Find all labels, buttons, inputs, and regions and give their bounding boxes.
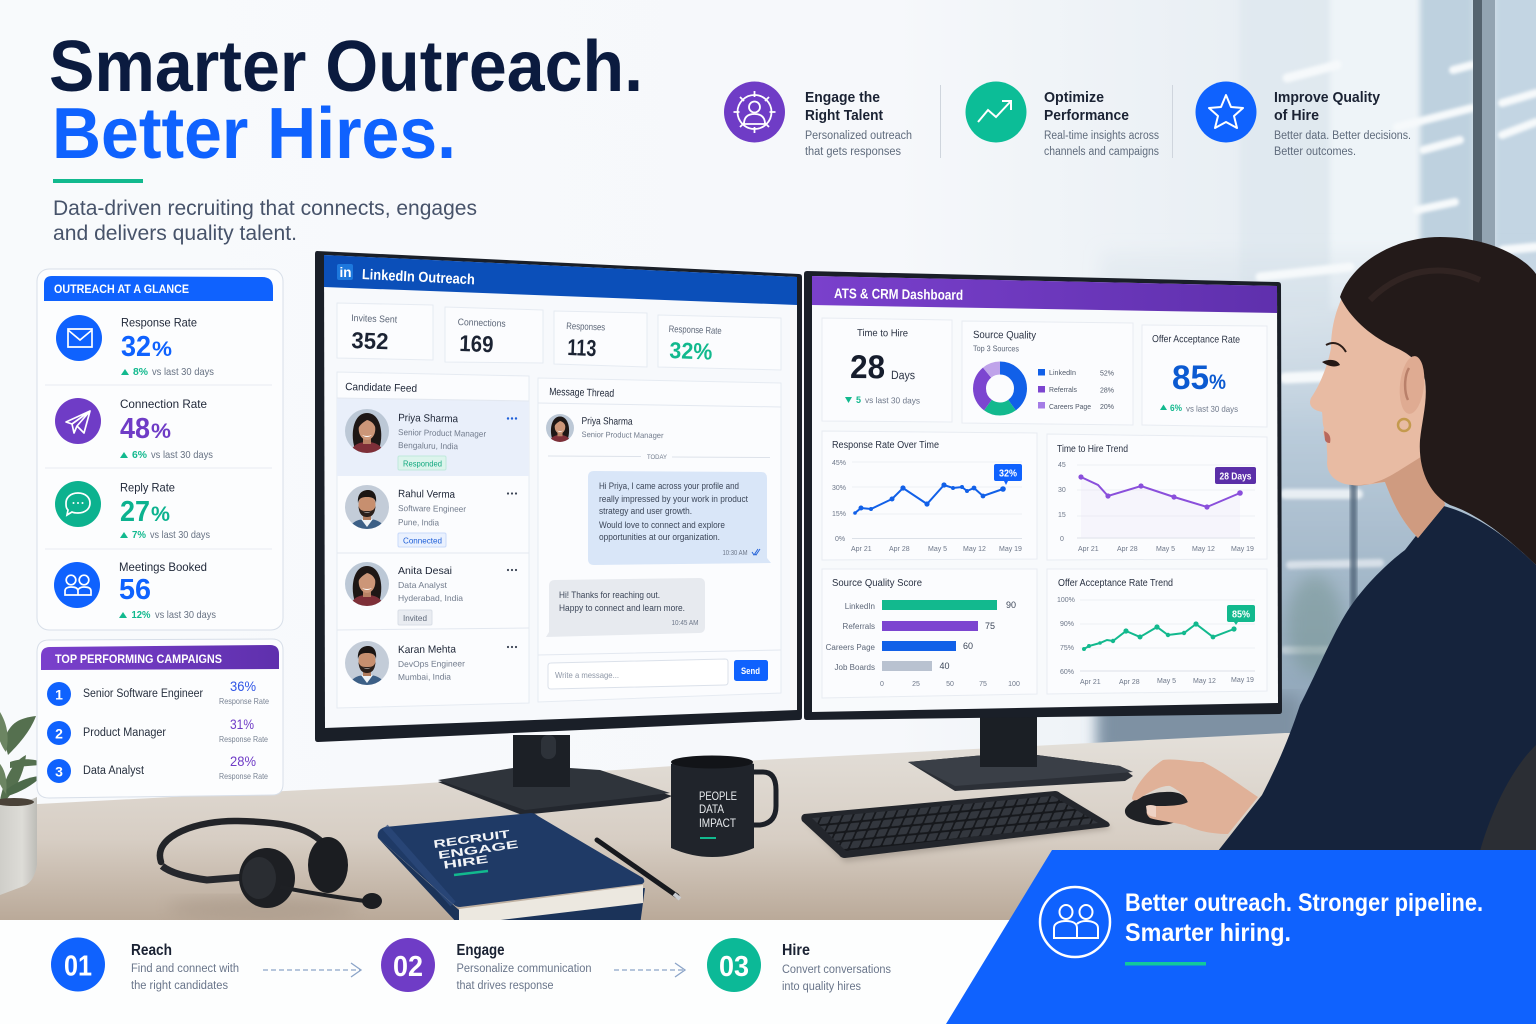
panel: candidate feed: [337, 372, 529, 708]
campaign: product manager: Product Manager: [83, 727, 166, 739]
card: source quality donut: 52%: [1100, 368, 1114, 378]
card: source quality donut: Referrals: [1049, 385, 1077, 394]
line chart: time to hire trend: [1047, 434, 1267, 560]
bar chart: source quality score: 50: [946, 681, 954, 688]
candidate: Anita Desai: [345, 562, 517, 625]
icon: people in circle: [1040, 887, 1110, 957]
metric: meetings booked: vs last 30 days: [155, 609, 216, 621]
step 02: engage: Personalize communication: [456, 963, 592, 975]
card: offer acceptance rate: [1142, 325, 1267, 427]
campaign: data analyst: 28%: [230, 754, 256, 769]
card: offer acceptance rate: vs last 30 days: [1186, 404, 1238, 414]
line chart: response rate over time: Response Rate Over Time: [832, 440, 939, 451]
notebook: recruit engage hire: HIRE: [443, 854, 489, 872]
metric: reply rate: vs last 30 days: [150, 529, 210, 541]
step 03: hire: Convert conversations: [782, 964, 891, 976]
stat card: invites sent: [337, 303, 433, 360]
step 01: reach: Find and connect with: [131, 963, 239, 975]
card: source quality donut: Source Quality: [973, 329, 1037, 342]
line chart: response rate over time: 45%: [832, 460, 846, 467]
header bar: LinkedIn Outreach: [362, 267, 475, 288]
candidate: Priya Sharma: [345, 409, 517, 470]
feature: improve quality of hire: of Hire: [1274, 107, 1319, 124]
metric: meetings booked: Meetings Booked: [119, 560, 207, 574]
candidate: Karan Mehta: Karan Mehta: [398, 643, 456, 656]
line chart: time to hire trend: Time to Hire Trend: [1057, 444, 1128, 455]
stat card: response rate: [658, 315, 781, 370]
long dark hair: [1340, 237, 1536, 565]
line chart: response rate over time: 32%: [999, 468, 1017, 480]
jacket: [1218, 505, 1536, 851]
metric: response rate: vs last 30 days: [152, 366, 214, 378]
mug: people data impact: IMPACT: [699, 816, 737, 830]
metric: reply rate: 7%: [132, 529, 147, 541]
feature: optimize performance: Optimize: [1044, 89, 1104, 106]
bar chart: source quality score: Job Boards: [835, 663, 875, 672]
line chart: response rate over time: Apr 21: [851, 546, 872, 553]
campaign: senior software engineer: [47, 679, 269, 706]
candidate: Priya Sharma: Priya Sharma: [398, 412, 458, 425]
message bubble: outgoing: really impressed by your work in product: [599, 494, 749, 504]
candidate: Karan Mehta: Mumbai, India: [398, 672, 451, 682]
hand on mouse: [1125, 759, 1258, 834]
step 03: hire: 03: [719, 951, 749, 983]
panel: message thread: Priya Sharma: [582, 416, 633, 428]
step 02: engage: Engage: [456, 942, 505, 959]
metric: reply rate: %: [151, 503, 170, 526]
line chart: offer acceptance rate trend: [1047, 569, 1267, 694]
line chart: response rate over time: [822, 431, 1037, 560]
line chart: response rate over time: Apr 28: [889, 546, 910, 553]
metric: response rate: 8%: [133, 366, 149, 378]
desk: [0, 733, 1536, 925]
bar chart: source quality score: Careers Page: [826, 643, 876, 652]
card: source quality donut: 20%: [1100, 402, 1114, 411]
message bubble: reply: 10:45 AM: [672, 620, 699, 627]
plant in pot: [0, 712, 46, 895]
line chart: offer acceptance rate trend: 60%: [1060, 669, 1074, 676]
campaign: data analyst: Data Analyst: [83, 765, 145, 777]
notebook: recruit engage hire: RECRUIT: [433, 828, 511, 851]
keyboard: [801, 791, 1112, 862]
stat card: responses: [554, 311, 647, 367]
metric: response rate: [56, 315, 214, 378]
card: offer acceptance rate: Offer Acceptance Rate: [1152, 334, 1240, 346]
feature: improve quality of hire: Improve Quality: [1274, 89, 1381, 106]
donut chart: [980, 368, 1020, 409]
message bubble: outgoing: Hi Priya, I came across your profile and: [599, 481, 739, 491]
candidate: Anita Desai: Data Analyst: [398, 580, 448, 590]
ear and earring: [1397, 355, 1427, 431]
mug: people data impact: PEOPLE: [699, 789, 737, 803]
campaign: senior software engineer: 36%: [230, 679, 256, 694]
metric: reply rate: Reply Rate: [120, 480, 175, 494]
metric: connection rate: vs last 30 days: [151, 449, 213, 461]
bar chart: source quality score: [822, 569, 1037, 698]
subtitle: Data-driven recruiting that connects, engages: [53, 196, 477, 220]
card: source quality donut: Careers Page: [1049, 402, 1091, 411]
card: offer acceptance rate: 6%: [1170, 403, 1182, 413]
line chart: response rate over time: May 12: [963, 546, 986, 553]
stat card: response rate: Response Rate: [668, 324, 722, 337]
line chart: time to hire trend: Apr 21: [1078, 546, 1099, 553]
line chart: response rate over time: 15%: [832, 511, 846, 518]
feature: optimize performance: channels and campaigns: [1044, 146, 1159, 158]
campaign: product manager: [47, 717, 268, 745]
step 01: reach: the right candidates: [131, 980, 228, 992]
candidate: Rahul Verma: Software Engineer: [398, 503, 466, 514]
panel header: [44, 276, 273, 301]
callout: blue banner: Better outreach. Stronger pipeline.: [1125, 889, 1483, 917]
line chart: offer acceptance rate trend: 90%: [1060, 621, 1074, 628]
panel: message thread: Senior Product Manager: [582, 430, 664, 440]
metric: meetings booked: 12%: [132, 609, 151, 621]
line chart: time to hire trend: 0: [1060, 536, 1064, 543]
line chart: response rate over time: May 19: [999, 546, 1022, 553]
bar chart: source quality score: 60: [963, 641, 973, 651]
metric: response rate: %: [152, 338, 172, 361]
campaign: data analyst: 3: [55, 764, 63, 780]
bar chart: source quality score: 90: [1006, 600, 1016, 610]
message bubble: outgoing: strategy and user growth.: [599, 506, 692, 516]
header bar: [812, 276, 1277, 313]
campaign: senior software engineer: Senior Software Engineer: [83, 688, 203, 700]
feature: engage the right talent: Personalized outreach: [805, 130, 912, 142]
message bubble: reply: [546, 578, 705, 637]
metric: connection rate: [55, 397, 213, 461]
stat card: responses: Responses: [566, 321, 606, 333]
card: time to hire: [822, 318, 952, 422]
bar chart: source quality score: 75: [979, 681, 987, 688]
candidate: Rahul Verma: [345, 485, 517, 547]
stat card: connections: 169: [459, 330, 494, 357]
campaign: data analyst: [47, 754, 268, 783]
callout: blue banner: Smarter hiring.: [1125, 919, 1291, 947]
metric: connection rate: %: [151, 420, 171, 443]
line chart: offer acceptance rate trend: May 12: [1193, 678, 1216, 685]
line chart: offer acceptance rate trend: May 5: [1157, 678, 1176, 685]
step 02: engage: [381, 938, 592, 992]
panel header: TOP PERFORMING CAMPAIGNS: [55, 652, 222, 666]
line chart: offer acceptance rate trend: 85%: [1232, 610, 1250, 620]
line chart: offer acceptance rate trend: Offer Acceptance Rate Trend: [1058, 578, 1173, 589]
message bubble: outgoing: Would love to connect and explore: [599, 520, 725, 530]
feature: engage the right talent: Right Talent: [805, 107, 883, 124]
divider: [1172, 85, 1173, 158]
notebook: recruit engage hire: ENGAGE: [437, 839, 519, 862]
line chart: time to hire trend: 15: [1058, 512, 1066, 519]
line chart: response rate over time: May 5: [928, 546, 947, 553]
metric: reply rate: [55, 480, 210, 541]
face and neck: [1310, 292, 1445, 538]
panel: candidate feed: Candidate Feed: [345, 381, 417, 395]
bar chart: source quality score: 25: [912, 681, 920, 688]
step 03: hire: into quality hires: [782, 981, 861, 993]
metric: reply rate: 27: [120, 496, 150, 528]
feature: optimize performance: Real-time insights across: [1044, 130, 1159, 142]
line chart: offer acceptance rate trend: Apr 28: [1119, 679, 1140, 686]
message input and send button: Send: [741, 666, 760, 677]
bar chart: source quality score: Referrals: [843, 622, 875, 631]
monitor stand: left: [438, 735, 672, 815]
campaign: senior software engineer: Response Rate: [219, 696, 269, 706]
card: offer acceptance rate: %: [1209, 371, 1226, 394]
title: Better Hires.: [52, 94, 456, 174]
card: source quality donut: LinkedIn: [1049, 368, 1076, 377]
card: source quality donut: 28%: [1100, 386, 1114, 394]
candidate: Priya Sharma: Bengaluru, India: [398, 440, 458, 451]
step 02: engage: that drives response: [456, 980, 554, 992]
panel: message thread: TODAY: [647, 454, 668, 461]
line chart: response rate over time: 0%: [835, 536, 845, 543]
line chart: time to hire trend: 30: [1058, 487, 1066, 494]
stat card: responses: 113: [567, 334, 597, 361]
bar chart: source quality score: 100: [1008, 681, 1020, 688]
candidate: Priya Sharma: Senior Product Manager: [398, 427, 486, 439]
bar chart: source quality score: LinkedIn: [845, 602, 875, 611]
headset: [160, 821, 382, 920]
candidate: Karan Mehta: DevOps Engineer: [398, 658, 465, 669]
notebook: recruit engage hire: [378, 813, 645, 925]
message bubble: reply: Happy to connect and learn more.: [559, 603, 685, 613]
line chart: response rate over time: 30%: [832, 485, 846, 492]
message input and send button: Write a message...: [555, 671, 619, 680]
panel: outreach at a glance: [37, 269, 283, 630]
line chart: offer acceptance rate trend: 75%: [1060, 645, 1074, 652]
feature: engage the right talent: [724, 82, 912, 158]
stat card: connections: Connections: [458, 317, 506, 330]
panel: top performing campaigns: [37, 639, 283, 798]
feature: optimize performance: [966, 82, 1159, 158]
panel: message thread: Message Thread: [549, 386, 614, 400]
step 01: reach: Reach: [131, 942, 172, 959]
card: source quality donut: [962, 321, 1133, 425]
subtitle: [53, 196, 477, 245]
candidate: Rahul Verma: Connected: [403, 536, 442, 546]
message bubble: reply: Hi! Thanks for reaching out.: [559, 590, 660, 600]
step 03: hire: Hire: [782, 942, 810, 959]
message bubble: outgoing: [588, 471, 771, 565]
line chart: time to hire trend: 28 Days: [1220, 472, 1252, 482]
step 01: reach: [51, 938, 239, 992]
candidate: Rahul Verma: Pune, India: [398, 517, 439, 528]
title: Smarter Outreach.: [49, 27, 643, 107]
line chart: time to hire trend: May 12: [1192, 546, 1215, 553]
campaign: product manager: 31%: [230, 717, 254, 732]
arrow: [263, 963, 361, 977]
header bar: in: [340, 265, 352, 280]
metric: response rate: 32: [121, 331, 151, 363]
mug: people data impact: [671, 756, 776, 857]
step 01: reach: 01: [64, 950, 92, 982]
left monitor: LinkedIn Outreach: [315, 251, 802, 742]
campaign: product manager: Response Rate: [219, 734, 268, 744]
mug: people data impact: DATA: [699, 802, 724, 816]
candidate: Anita Desai: Hyderabad, India: [398, 593, 463, 603]
message input and send button: [548, 659, 768, 689]
card: time to hire: Time to Hire: [857, 328, 908, 339]
stat card: response rate: 32%: [669, 337, 713, 365]
line chart: time to hire trend: May 19: [1231, 546, 1254, 553]
card: time to hire: Days: [891, 368, 915, 382]
feature: engage the right talent: that gets responses: [805, 146, 901, 158]
line chart: offer acceptance rate trend: 100%: [1057, 597, 1075, 604]
stat card: invites sent: 352: [351, 327, 389, 354]
stat card: connections: [445, 307, 543, 363]
campaign: senior software engineer: 1: [55, 686, 63, 702]
metric: response rate: Response Rate: [121, 316, 197, 330]
divider: [940, 85, 941, 158]
bar chart: source quality score: 0: [880, 681, 884, 688]
card: time to hire: vs last 30 days: [865, 395, 920, 405]
bar chart: source quality score: 40: [940, 661, 950, 671]
line chart: time to hire trend: 45: [1058, 462, 1066, 469]
metric: meetings booked: 56: [119, 574, 151, 606]
message bubble: outgoing: opportunities at our organization.: [599, 532, 720, 542]
stat card: invites sent: Invites Sent: [351, 313, 398, 326]
metric: connection rate: 6%: [132, 449, 148, 461]
pen: [597, 840, 680, 899]
card: time to hire: 28: [850, 348, 885, 385]
feature: optimize performance: Performance: [1044, 107, 1129, 124]
title accent line: [53, 179, 143, 183]
step 03: hire: [707, 938, 891, 993]
line chart: time to hire trend: May 5: [1156, 546, 1175, 553]
panel header: OUTREACH AT A GLANCE: [54, 282, 189, 296]
candidate: Anita Desai: Anita Desai: [398, 565, 452, 577]
line chart: offer acceptance rate trend: Apr 21: [1080, 679, 1101, 686]
campaign: product manager: 2: [55, 726, 63, 742]
panel header: [41, 645, 279, 670]
feature: improve quality of hire: [1196, 82, 1411, 158]
line chart: offer acceptance rate trend: May 19: [1231, 677, 1254, 684]
callout: blue banner: [946, 850, 1536, 1024]
metric: connection rate: 48: [120, 413, 150, 445]
card: offer acceptance rate: 85: [1172, 359, 1209, 397]
candidate: Priya Sharma: Responded: [403, 460, 442, 468]
message bubble: outgoing: 10:30 AM: [722, 550, 748, 557]
subtitle: and delivers quality talent.: [53, 221, 297, 245]
panel: message thread: [538, 378, 781, 702]
bottom strip: process steps: [0, 920, 1040, 1024]
feature: improve quality of hire: Better data. Better decisions.: [1274, 130, 1411, 142]
monitor stand: right: [908, 712, 1133, 791]
right monitor: ATS and CRM dashboard: [804, 271, 1282, 720]
person: woman at desk: [1125, 237, 1536, 851]
step 02: engage: 02: [393, 951, 423, 983]
metric: connection rate: Connection Rate: [120, 397, 207, 411]
candidate: Karan Mehta: [345, 641, 517, 685]
candidate: Rahul Verma: Rahul Verma: [398, 488, 455, 501]
header bar: [324, 255, 797, 305]
arrow: [614, 963, 685, 977]
title: [49, 27, 643, 174]
candidate: Anita Desai: Invited: [403, 614, 427, 623]
card: source quality donut: Top 3 Sources: [973, 344, 1019, 353]
card: time to hire: 5: [856, 395, 861, 405]
metric: meetings booked: [54, 560, 216, 621]
campaign: data analyst: Response Rate: [219, 771, 268, 781]
bar chart: source quality score: 75: [985, 621, 995, 631]
header bar: ATS & CRM Dashboard: [834, 285, 963, 303]
feature: improve quality of hire: Better outcomes.: [1274, 146, 1356, 158]
line chart: time to hire trend: Apr 28: [1117, 546, 1138, 553]
feature: engage the right talent: Engage the: [805, 89, 880, 106]
chair: [1480, 745, 1536, 851]
bar chart: source quality score: Source Quality Score: [832, 578, 922, 589]
